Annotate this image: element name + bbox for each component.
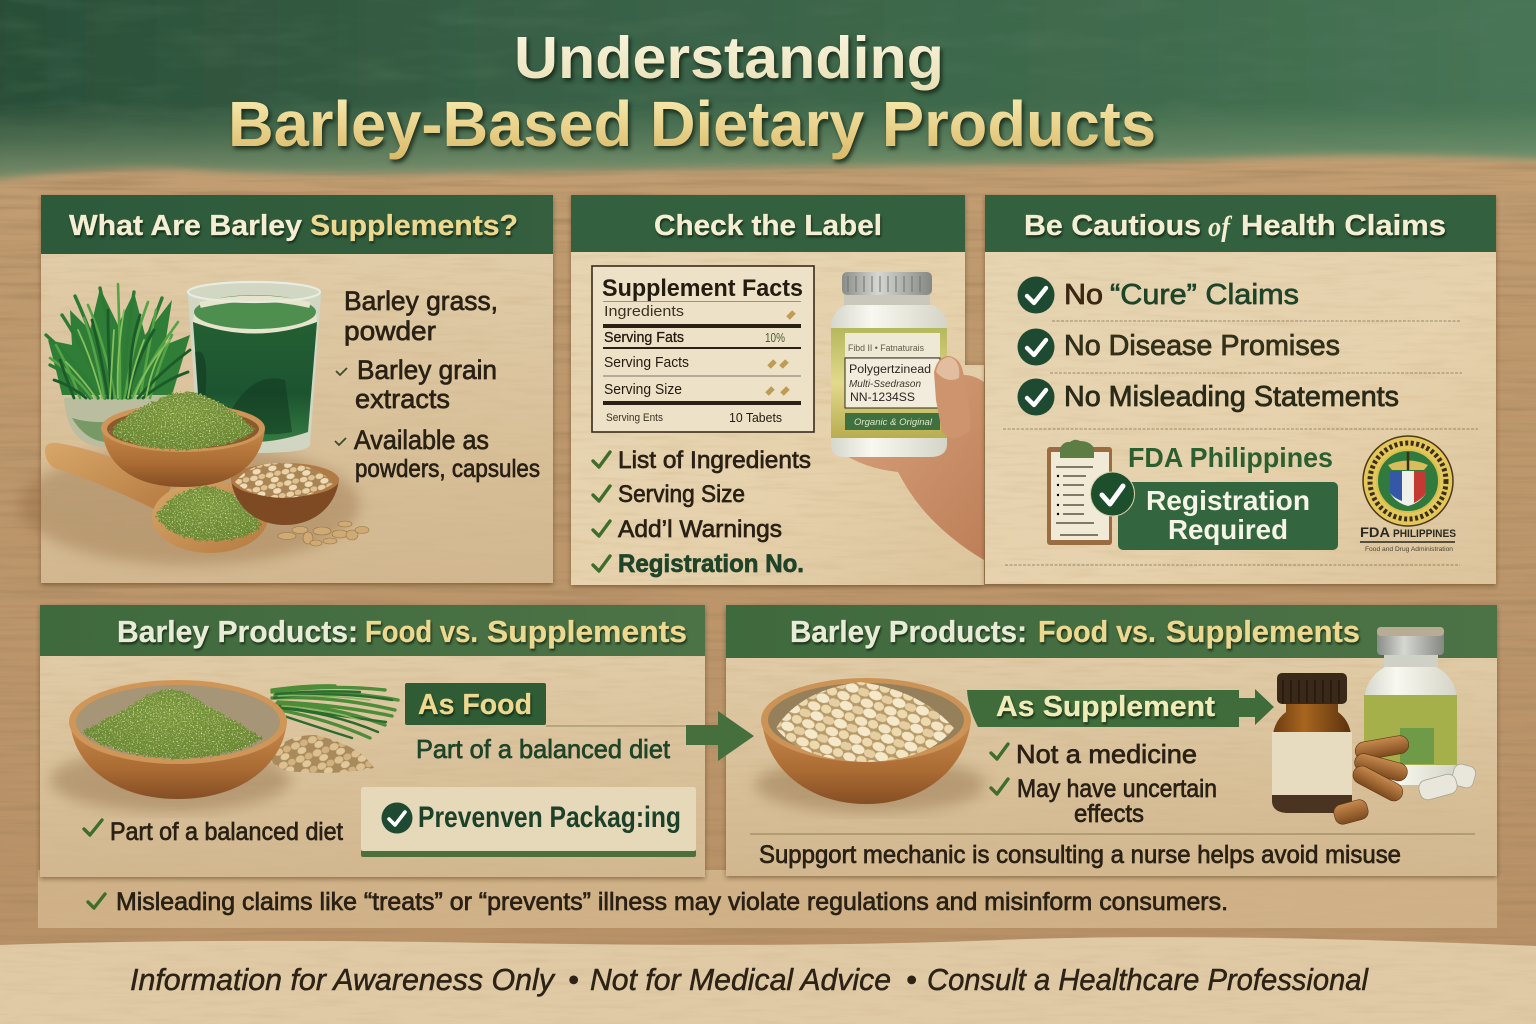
card: packaging: Prevenven Packag:ing — [418, 801, 681, 834]
icon: supplement bottle — [831, 272, 947, 457]
banner arrow: as supplement: As Supplement — [996, 691, 1215, 723]
checklist: label items — [593, 447, 811, 578]
footer text: Not for Medical Advice — [590, 962, 891, 997]
heading: food vs supplements: Barley Products: — [117, 614, 358, 649]
badge: registration required — [1090, 472, 1338, 550]
text: barley types: Barley grain — [357, 355, 497, 385]
supplement facts label: Serving Size — [604, 381, 682, 398]
footer disclaimer — [0, 937, 1536, 1024]
heading: check the label — [571, 195, 965, 252]
badge: registration required: Required — [1168, 514, 1288, 545]
panel: be cautious of health claims — [985, 195, 1496, 584]
icon: FDA seal — [1363, 436, 1453, 526]
checklist: label items: Add’l Warnings — [618, 516, 782, 543]
text: barley types: powder — [344, 316, 436, 346]
claim: no cure: “Cure” Claims — [1110, 279, 1299, 311]
checklist: label items: Serving Size — [618, 481, 745, 508]
title text: Barley-Based Dietary Products — [228, 88, 1156, 160]
title text — [228, 25, 1156, 160]
banner arrow: as supplement — [967, 689, 1274, 727]
icon: white supplement bottle — [1364, 627, 1457, 785]
badge: registration required: Registration — [1146, 485, 1310, 516]
heading: be cautious of health claims: Health Claims — [1241, 210, 1446, 242]
title banner — [0, 0, 1536, 180]
heading: food vs supplements: Supplements — [487, 614, 687, 649]
icon: supplement bottle: Fibd II • Fatnaturais — [848, 343, 924, 353]
icon: barley grass in glass bowl — [46, 284, 190, 447]
heading: food vs supplements — [726, 605, 1497, 658]
text: check part of a balanced diet: Part of a balanced diet — [110, 818, 343, 846]
icon: supplement bottle: NN-1234SS — [850, 390, 915, 404]
icon: glass of green juice — [188, 282, 321, 453]
supplement facts label: Supplement Facts — [602, 275, 803, 302]
icon: wooden bowl of green powder — [101, 392, 265, 487]
title text: Understanding — [514, 25, 944, 91]
supplement facts label: Ingredients — [604, 303, 684, 320]
icon: thumb — [934, 356, 970, 438]
heading: what are barley supplements — [41, 195, 553, 254]
heading: food vs supplements: Barley Products: — [790, 614, 1027, 649]
claim: no misleading statements: No Misleading Statements — [1064, 381, 1399, 413]
footer text — [130, 962, 1369, 997]
checklist: supplement notes — [991, 739, 1217, 828]
text: FDA Philippines seal caption: FDA — [1360, 524, 1390, 540]
checklist: label items: List of Ingredients — [618, 447, 811, 474]
supplement facts label: Serving Facts — [604, 354, 689, 371]
heading: check the label: Check the Label — [654, 210, 882, 242]
icon: supplement bottle: Polygertzinead — [849, 364, 931, 376]
text: FDA Philippines seal caption: PHILIPPINES — [1393, 528, 1456, 540]
icon: grain pile — [270, 735, 374, 773]
checklist: label items: Registration No. — [618, 550, 804, 578]
label: FDA Philippines: FDA Philippines — [1128, 442, 1333, 473]
claim: no disease promises: No Disease Promises — [1064, 330, 1340, 362]
text: barley types: extracts — [355, 384, 450, 414]
text: support note: Suppgort mechanic is consulting a nurse helps avoid misuse — [759, 841, 1401, 869]
icon: amber bottle — [1272, 673, 1352, 813]
text: barley types: powders, capsules — [355, 455, 540, 483]
panel: what are barley supplements — [20, 195, 553, 583]
supplement facts label: 10% — [765, 330, 785, 345]
checklist: supplement notes: May have uncertain — [1017, 775, 1217, 803]
text: barley types: Available as — [354, 425, 489, 455]
icon: bowl of green powder — [69, 680, 287, 799]
card: packaging — [361, 787, 696, 857]
panel: food — [40, 605, 705, 877]
footer text: Consult a Healthcare Professional — [927, 962, 1369, 997]
bottom strip: misleading claims — [38, 870, 1497, 928]
heading: be cautious of health claims: Be Cautious — [1024, 210, 1201, 242]
bottom strip: misleading claims: Misleading claims like “treats” or “prevents” illness may violate regulations and misinform consumers. — [116, 888, 1228, 916]
panel: supplement — [726, 605, 1497, 876]
heading: food vs supplements: Food vs. — [365, 614, 478, 649]
text: FDA Philippines seal caption — [1360, 524, 1456, 553]
heading: food vs supplements — [40, 605, 705, 656]
footer text: Information for Awareness Only — [130, 962, 556, 997]
supplement facts label: Serving Fats — [604, 329, 684, 346]
heading: food vs supplements: Food vs. — [1038, 614, 1156, 649]
claim: no cure — [1018, 276, 1299, 314]
icon: bowl of barley grains — [761, 678, 971, 804]
footer text: • — [906, 962, 917, 997]
icon: wooden spoon with powder — [45, 443, 268, 553]
icon: capsules and pills — [1332, 734, 1477, 826]
icon: loose grains — [278, 521, 369, 546]
footer text: • — [568, 962, 579, 997]
heading: what are barley supplements: What Are Barley — [69, 210, 302, 242]
text: barley types — [335, 286, 540, 483]
claim: no cure: No — [1064, 279, 1103, 311]
heading: be cautious of health claims — [985, 195, 1496, 252]
icon: supplement bottle: Organic & Original — [854, 417, 933, 428]
icon: hand — [835, 375, 984, 560]
icon: barley grass sprig — [272, 686, 398, 738]
supplement facts label: 10 Tabets — [729, 410, 782, 425]
checklist: supplement notes: effects — [1074, 800, 1144, 828]
arrow: food to supplement — [686, 711, 754, 761]
checklist: supplement notes: Not a medicine — [1016, 739, 1197, 769]
icon: small bowl of grains — [231, 463, 339, 525]
text: barley types: Barley grass, — [344, 286, 498, 316]
supplement facts label — [592, 266, 814, 432]
supplement facts label: Serving Ents — [606, 412, 663, 424]
icon: supplement bottle: Multi-Ssedrason — [849, 378, 921, 390]
text: FDA Philippines seal caption: Food and Drug Administration — [1365, 547, 1453, 553]
badge: as food: As Food — [418, 689, 532, 721]
heading: be cautious of health claims: of — [1208, 212, 1233, 243]
heading: food vs supplements: Supplements — [1166, 614, 1360, 649]
panel: check the label — [571, 195, 984, 585]
badge: as food — [405, 683, 546, 725]
text: part of a balanced diet: Part of a balanced diet — [416, 734, 671, 764]
heading: what are barley supplements: Supplements? — [310, 210, 518, 242]
icon: clipboard — [1047, 440, 1112, 545]
